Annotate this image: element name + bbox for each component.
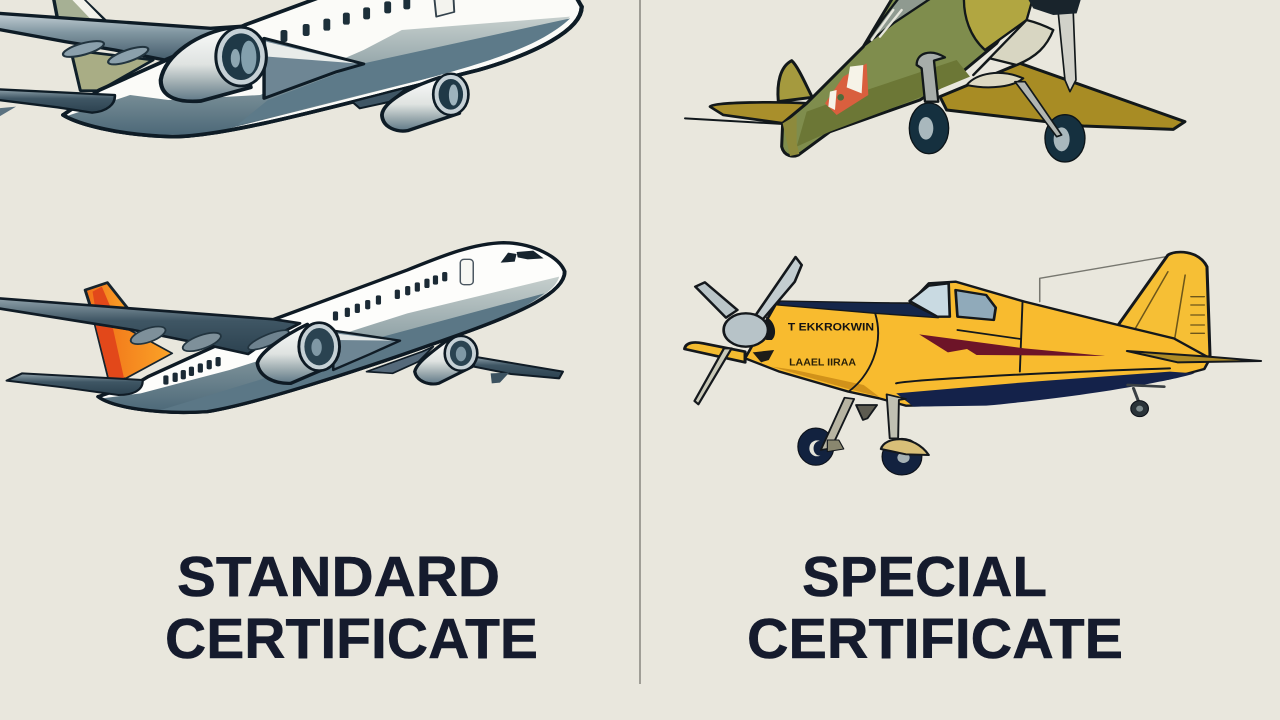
left wing blade [685,342,745,362]
heading: special certificate [747,545,1123,671]
wing root fairing [333,331,400,370]
main engine [257,323,340,383]
horizontal stabilizer [7,373,143,395]
thin trailing wire [685,118,783,124]
main engine [161,27,266,101]
engine cowl [964,0,1033,50]
tail fin [1118,252,1210,357]
panel lines [848,302,1023,392]
cabin door [460,259,473,285]
far engine [352,74,468,131]
heading line: standard: STANDARD [177,545,500,609]
propeller hub [1027,0,1082,15]
cabin door [434,0,454,17]
maroon lightning stripe [919,334,1106,356]
heading: standard certificate [165,545,538,671]
right wing [940,63,1185,129]
top stripe [778,301,938,318]
horizontal stabilizer [1127,351,1261,362]
main landing gear [798,394,929,475]
airliner with orange tail [0,243,565,413]
propeller [1057,0,1076,92]
cabin windows [281,0,410,42]
divider line [639,0,641,684]
fuselage lettering: T EKKROKWIN [788,320,874,333]
far engine [415,336,477,384]
heading line: special: SPECIAL [802,545,1047,609]
canopy [865,0,933,45]
tail wheel [1128,385,1164,417]
belly stripe [896,372,1195,407]
insignia [825,63,868,115]
tail fin [778,61,812,102]
canopy windows [910,283,996,320]
wing [0,298,300,355]
tail plane [710,102,808,123]
small lettering: LAAEL IIRAA [789,357,856,368]
wheel fairing [967,73,1023,87]
aerial wire [1040,257,1166,302]
nose and prop blades [695,257,802,404]
left main wheel gear [909,53,949,154]
cockpit windows [501,251,544,263]
far wing [367,347,563,383]
yellow propeller plane [685,252,1261,475]
fuselage [63,0,582,137]
vintage olive plane [685,0,1185,162]
heading line: certificate: CERTIFICATE [747,607,1123,671]
wing [0,13,245,68]
orange tail fin [85,283,172,378]
nose panel [973,20,1053,75]
horizontal stabilizer [0,89,115,117]
heading line: certificate: CERTIFICATE [165,607,538,671]
cabin windows [163,272,447,385]
fuselage [745,282,1210,406]
airliner top left [0,0,582,137]
tail fin [54,0,153,91]
right main wheel gear [1015,82,1085,162]
fuselage [98,243,565,413]
fuselage [782,0,1027,156]
wing root fairing [264,38,364,98]
